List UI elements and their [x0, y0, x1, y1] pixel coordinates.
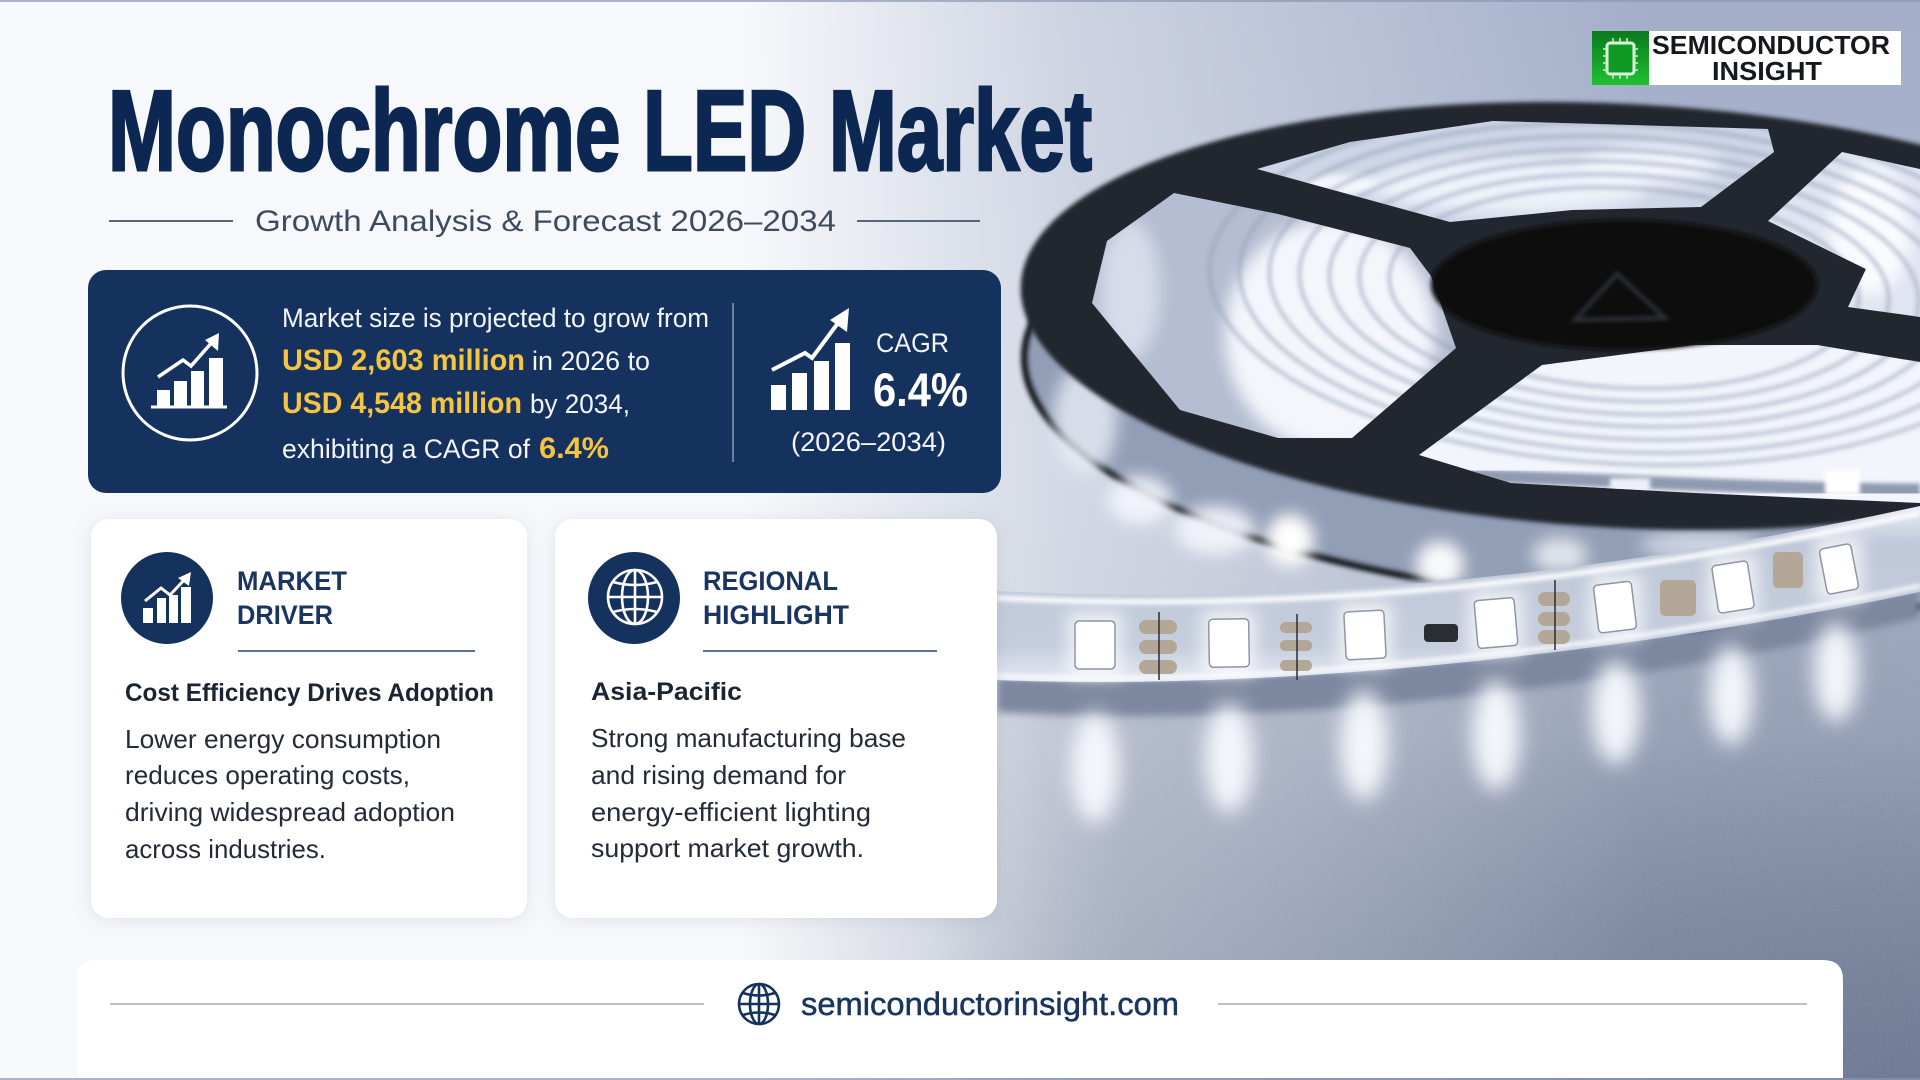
strip shadow	[997, 588, 1920, 716]
LED reflections on table	[1071, 622, 1858, 823]
CAGR figure: 6.4%	[873, 363, 968, 416]
background photo: LED strip reel	[794, 0, 1920, 1080]
regional highlight body: Strong manufacturing base	[591, 723, 906, 753]
logo: Semiconductor Insight	[1592, 30, 1901, 86]
website address: semiconductorinsight.com	[801, 986, 1179, 1022]
market driver body: reduces operating costs,	[125, 760, 410, 790]
icon: globe	[588, 552, 680, 644]
market size text	[282, 303, 709, 465]
market driver body: across industries.	[125, 834, 326, 864]
icon: chip	[1603, 38, 1638, 79]
market driver body	[125, 724, 455, 864]
market driver subheading: Cost Efficiency Drives Adoption	[125, 679, 494, 707]
market size text: 6.4%	[539, 432, 609, 465]
icon: market driver chart	[121, 552, 213, 644]
LED chips	[1075, 543, 1859, 669]
regional highlight heading: REGIONAL	[703, 566, 838, 596]
market driver heading: DRIVER	[237, 600, 333, 630]
market driver body: driving widespread adoption	[125, 797, 455, 827]
market size text: USD 4,548 million	[282, 387, 522, 420]
market driver heading: MARKET	[237, 566, 347, 596]
regional highlight body: energy-efficient lighting	[591, 797, 871, 827]
regional highlight body: support market growth.	[591, 833, 864, 863]
reel window: bottom	[1410, 340, 1920, 510]
reel hub	[1431, 220, 1817, 350]
logo wordmark: INSIGHT	[1712, 56, 1822, 86]
CAGR figure	[791, 328, 968, 457]
reel body with spokes	[1010, 73, 1920, 559]
frame edge	[0, 0, 1920, 2]
regional highlight body	[591, 723, 906, 863]
panel: footer website bar	[77, 960, 1843, 1078]
solder pads and components	[1139, 552, 1803, 674]
panel: regional highlight	[555, 519, 997, 918]
regional highlight heading	[703, 566, 849, 630]
coiled LED tape seen through windows	[1200, 91, 1920, 495]
icon: growth chart in circle	[123, 306, 257, 440]
lower reel flange	[1014, 139, 1920, 631]
regional highlight heading: HIGHLIGHT	[703, 600, 849, 630]
subtitle with rules: Growth Analysis & Forecast 2026–2034	[255, 205, 836, 238]
LED tape strip	[997, 506, 1920, 682]
panel: market size summary	[88, 270, 1001, 493]
icon: footer globe	[739, 984, 779, 1024]
market size text: in 2026 to	[532, 346, 650, 376]
reel window: right	[1760, 150, 1920, 320]
reel window: top	[1257, 121, 1774, 222]
panel: market driver	[91, 519, 527, 918]
logo wordmark: SEMICONDUCTOR	[1652, 30, 1890, 60]
LED chip glow	[1068, 536, 1863, 678]
market size text: by 2034,	[530, 389, 630, 419]
reel window: left	[1092, 193, 1456, 438]
market size text: Market size is projected to grow from	[282, 303, 709, 333]
market size text: exhibiting a CAGR of	[282, 434, 530, 464]
logo wordmark	[1652, 30, 1890, 86]
market driver heading	[237, 566, 347, 630]
market size text: USD 2,603 million	[282, 344, 525, 377]
regional highlight subheading: Asia-Pacific	[591, 678, 742, 706]
CAGR figure: (2026–2034)	[791, 427, 946, 457]
dark cable	[1680, 606, 1920, 632]
icon: CAGR growth bars	[771, 308, 850, 410]
title: Monochrome LED Market	[108, 68, 1092, 195]
bottom frame edge	[0, 1078, 1920, 1080]
CAGR figure: CAGR	[876, 328, 949, 358]
regional highlight body: and rising demand for	[591, 760, 846, 790]
market driver body: Lower energy consumption	[125, 724, 441, 754]
